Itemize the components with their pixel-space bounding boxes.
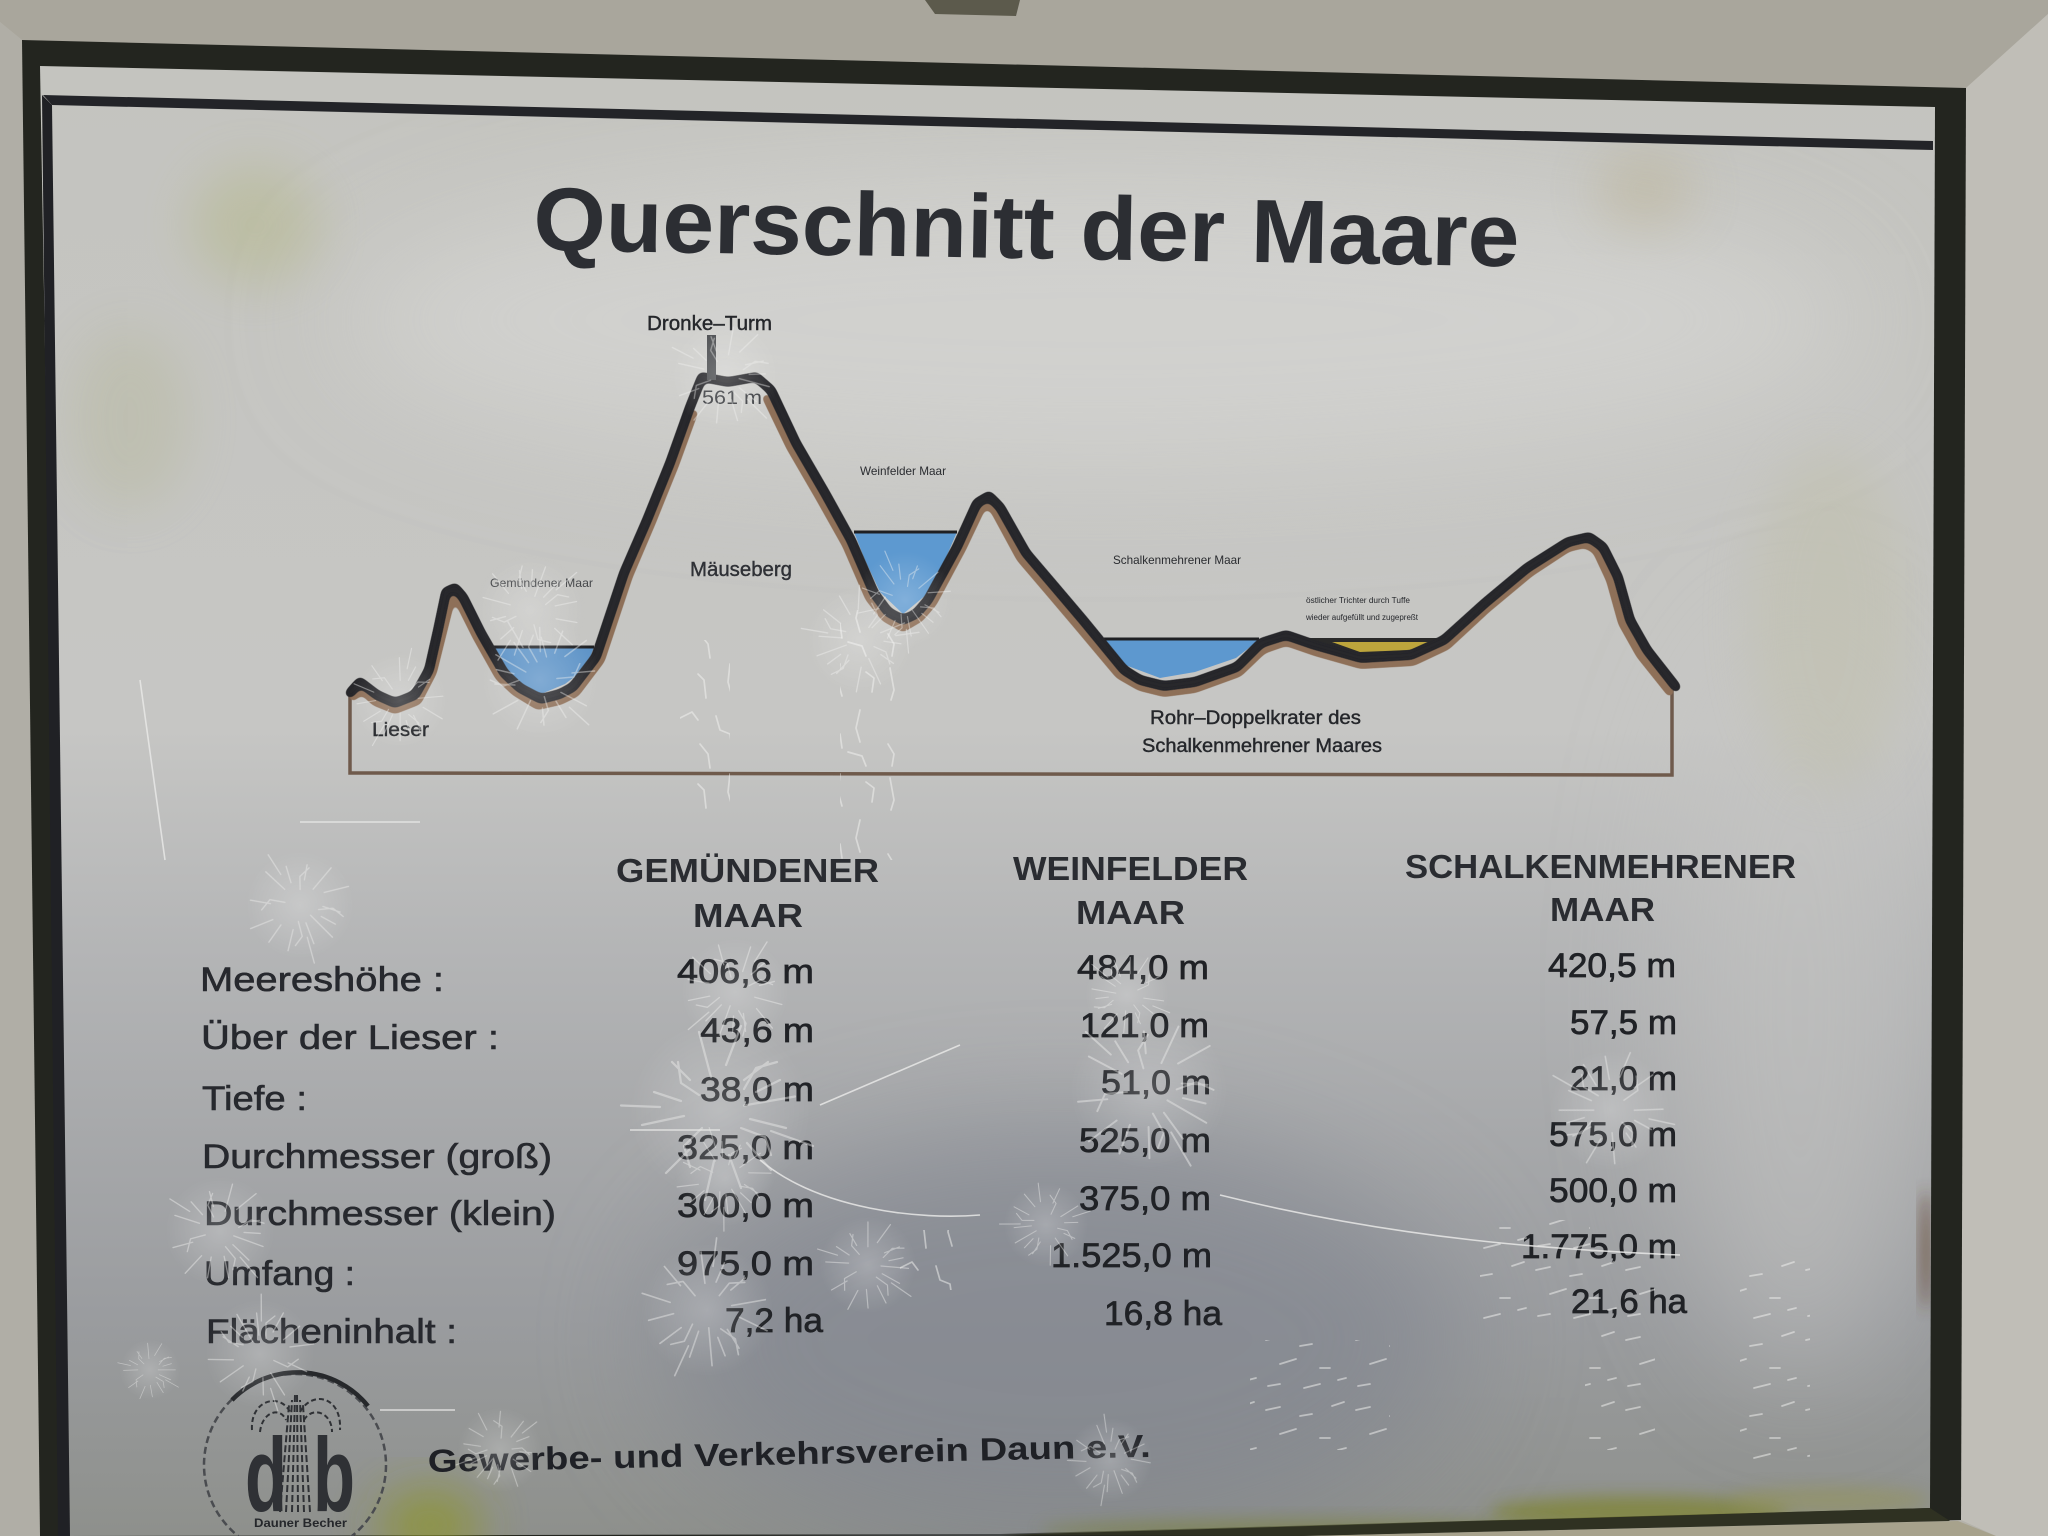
value: 406,6 m xyxy=(677,953,814,991)
value: 16,8 ha xyxy=(1104,1295,1222,1333)
texture: cracked film overlay xyxy=(112,299,1810,1511)
value: 484,0 m xyxy=(1077,949,1209,987)
value: 38,0 m xyxy=(700,1071,814,1109)
tuff fill: yellow xyxy=(1332,642,1428,652)
heading: Weinfelder Maar line 2: MAAR xyxy=(1076,894,1185,931)
value: 1.525,0 m xyxy=(1051,1237,1212,1275)
rule: left black line of the plate xyxy=(42,95,70,1536)
rule: top black line of the plate xyxy=(43,95,1933,150)
label: Gemündener Maar: Gemündener Maar xyxy=(490,576,593,590)
water surface lines xyxy=(492,532,1259,647)
row label: Über der Lieser: Über der Lieser : xyxy=(201,1019,499,1057)
value: 21,0 m xyxy=(1570,1060,1677,1098)
value: 420,5 m xyxy=(1548,947,1676,985)
table: row labels xyxy=(200,961,556,1351)
water: Weinfelder Maar xyxy=(854,532,957,614)
fountain arcs xyxy=(252,1399,340,1432)
label: Schalkenmehrener Maar: Schalkenmehrener Maar xyxy=(1113,553,1241,567)
value: 500,0 m xyxy=(1549,1172,1677,1210)
value: 975,0 m xyxy=(677,1245,814,1283)
value: 375,0 m xyxy=(1079,1180,1211,1218)
icon: Dronke tower xyxy=(707,335,716,380)
label: Dronke-Turm: Dronke–Turm xyxy=(647,313,772,335)
logo letter b: b xyxy=(313,1417,355,1534)
row label: Durchmesser klein: Durchmesser (klein) xyxy=(204,1195,556,1233)
label: Rohr-Doppelkrater line 2: Schalkenmehrener Maares xyxy=(1142,736,1382,757)
label: Weinfelder Maar: Weinfelder Maar xyxy=(860,464,946,478)
heading: Weinfelder Maar: WEINFELDER xyxy=(1013,850,1248,887)
value: 51,0 m xyxy=(1101,1064,1211,1102)
water: Schalkenmehrener Maar xyxy=(1104,640,1259,678)
row label: Meereshöhe: Meereshöhe : xyxy=(200,961,444,999)
heading: Gemündener Maar line 2: MAAR xyxy=(693,897,803,934)
value: 21,6 ha xyxy=(1571,1283,1687,1321)
value: 325,0 m xyxy=(677,1129,814,1167)
heading: Gemündener Maar: GEMÜNDENER xyxy=(616,852,879,889)
footer: publisher: Gewerbe- und Verkehrsverein Daun e.V. xyxy=(427,1428,1151,1479)
table: Weinfelder Maar values xyxy=(1051,949,1222,1333)
row label: Durchmesser groß: Durchmesser (groß) xyxy=(202,1138,552,1176)
table: Gemündener Maar values xyxy=(677,953,823,1340)
logo caption: Dauner Becher xyxy=(254,1516,347,1530)
label: summit height: 561 m xyxy=(702,388,762,409)
row label: Umfang: Umfang : xyxy=(204,1255,355,1293)
value: 43,6 m xyxy=(700,1012,814,1050)
value: 121,0 m xyxy=(1080,1007,1209,1045)
water: Gemündener Maar xyxy=(492,647,594,694)
label: Lieser: Lieser xyxy=(372,720,430,741)
east crater fill xyxy=(1290,638,1444,660)
value: 575,0 m xyxy=(1549,1116,1677,1154)
row label: Flächeninhalt: Flächeninhalt : xyxy=(206,1313,457,1351)
value: 300,0 m xyxy=(677,1187,814,1225)
value: 525,0 m xyxy=(1079,1122,1211,1160)
fountain jets xyxy=(280,1395,310,1512)
value: 7,2 ha xyxy=(725,1302,823,1340)
value: 57,5 m xyxy=(1570,1004,1677,1042)
frame: lower dark edge xyxy=(1000,1508,1950,1536)
title: Querschnitt der Maare xyxy=(533,170,1520,286)
label: Mäuseberg: Mäuseberg xyxy=(690,559,792,581)
logo letter d: d xyxy=(245,1417,287,1534)
terrain: brown underlay xyxy=(350,395,1672,710)
value: 1.775,0 m xyxy=(1521,1228,1677,1266)
label: östlicher Trichter note line 1: östlicher Trichter durch Tuffe xyxy=(1306,596,1411,605)
heading: Schalkenmehrener Maar line 2: MAAR xyxy=(1550,891,1655,928)
icon: Dauner Becher logo xyxy=(204,1372,386,1536)
table: column headings xyxy=(616,848,1796,934)
heading: Schalkenmehrener Maar: SCHALKENMEHRENER xyxy=(1405,848,1796,885)
label: östlicher Trichter note line 2: wieder aufgefüllt und zugepreßt xyxy=(1305,613,1419,622)
row label: Tiefe: Tiefe : xyxy=(202,1080,307,1118)
terrain: black ridge line xyxy=(350,377,1676,703)
chart: cross-section of the Maare xyxy=(350,313,1676,775)
table: Schalkenmehrener Maar values xyxy=(1521,947,1687,1321)
label: Rohr-Doppelkrater line 1: Rohr–Doppelkrater des xyxy=(1150,708,1361,729)
baseline frame of section xyxy=(350,690,1672,775)
